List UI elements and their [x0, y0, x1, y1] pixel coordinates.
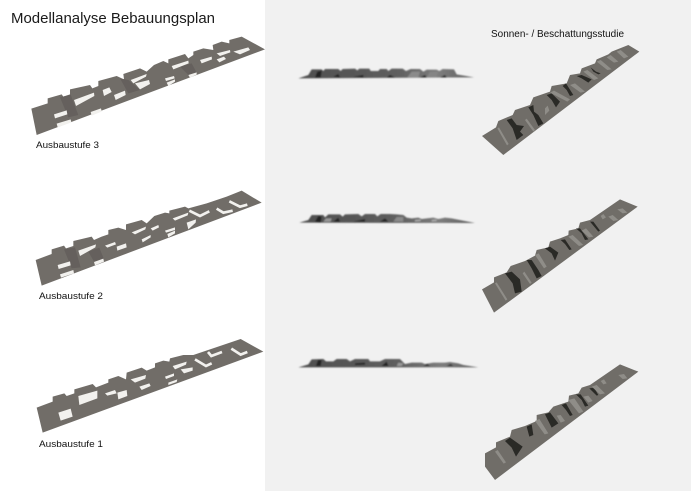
label: Ausbaustufe 2: Ausbaustufe 2 [39, 291, 103, 302]
label: Ausbaustufe 3: Ausbaustufe 3 [36, 140, 99, 151]
label: Ausbaustufe 1: Ausbaustufe 1 [39, 439, 103, 450]
side view 2 [299, 214, 475, 223]
model: Ausbaustufe 1 [37, 339, 263, 433]
title: Modellanalyse Bebauungsplan [11, 11, 215, 27]
shadow study 3 [482, 45, 639, 155]
model: Ausbaustufe 2 [36, 191, 262, 286]
panel: grey background [265, 0, 691, 491]
shadow study 2 [482, 199, 638, 313]
heading: sun and shadow study: Sonnen- / Beschattungsstudie [491, 29, 624, 40]
shadow study 1 [485, 364, 638, 480]
side view 3 [298, 69, 474, 78]
side view 1 [298, 359, 478, 367]
model: Ausbaustufe 3 [31, 37, 265, 135]
